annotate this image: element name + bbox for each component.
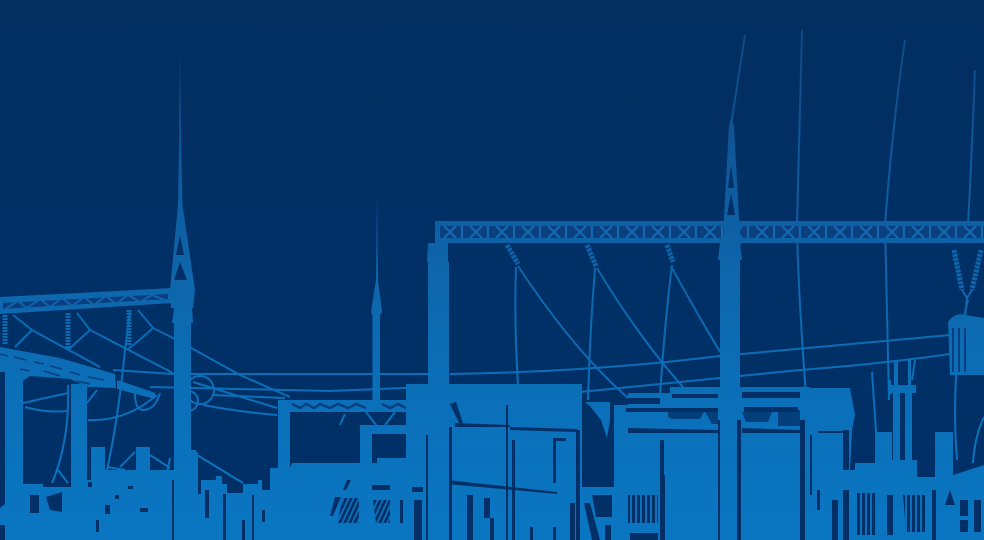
hatched cabinets (338, 498, 390, 523)
centre spike (371, 197, 382, 400)
insulator V hook (962, 290, 972, 318)
right tower (718, 118, 742, 540)
left lower truss and columns (0, 347, 155, 540)
small centre truss (278, 400, 430, 470)
insulators (507, 245, 981, 290)
hatched cabinets (628, 493, 925, 535)
main left column (427, 243, 449, 540)
central ground equipment (270, 384, 628, 540)
ground switch (890, 360, 916, 460)
left ground equipment (0, 447, 270, 540)
right substation block (626, 387, 984, 540)
left upper truss (0, 288, 173, 314)
left tower (170, 50, 196, 540)
main top truss (435, 221, 984, 243)
left insulators (5, 310, 129, 350)
tower lattice holes (174, 235, 187, 280)
right transformer (948, 314, 984, 375)
wedge panel (585, 402, 610, 438)
tower column (172, 308, 196, 540)
tower spike (170, 50, 195, 308)
